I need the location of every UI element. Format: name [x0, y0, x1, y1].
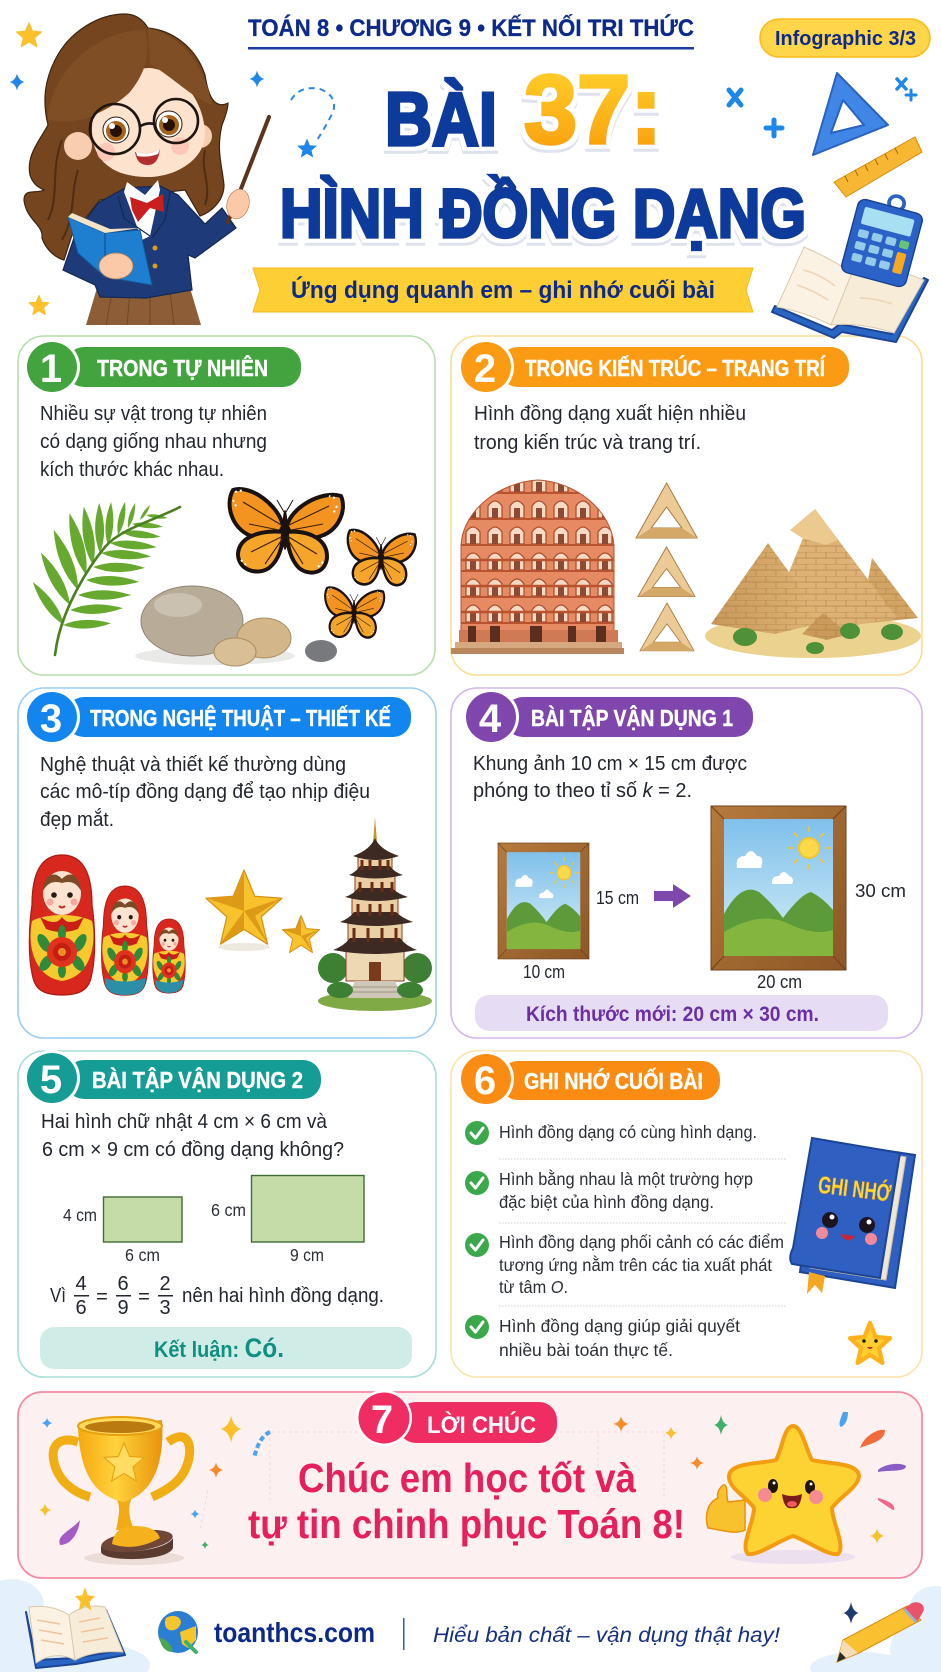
text block 1: kích thước khác nhau. [40, 459, 224, 481]
infographic badge [760, 19, 930, 57]
icon: similar triangles [636, 483, 697, 651]
label: 30 cm: 30 cm [855, 881, 906, 901]
blazer [63, 180, 236, 298]
heading 4: 4 [479, 697, 502, 741]
icon: set square [813, 73, 888, 155]
callout 4: Kích thước mới: 20 cm × 30 cm. [526, 1002, 819, 1026]
formula [50, 1273, 384, 1319]
title line 2: HÌNH ĐỒNG DẠNG [280, 175, 806, 252]
heading 7: 7 [371, 1398, 393, 1442]
subtitle ribbon: Ứng dụng quanh em – ghi nhớ cuối bài [291, 276, 715, 304]
wish message [248, 1455, 685, 1547]
subtitle ribbon [253, 268, 753, 312]
heading 4: BÀI TẬP VẬN DỤNG 1 [531, 704, 733, 731]
text block 1: có dạng giống nhau nhưng [40, 431, 267, 453]
heading 5: BÀI TẬP VẬN DỤNG 2 [92, 1066, 303, 1093]
icon: calculator [840, 187, 927, 288]
formula: 6 [117, 1273, 129, 1295]
heading 2: 2 [474, 347, 496, 391]
diagram: small rectangle [63, 1197, 182, 1265]
text block 5: Hai hình chữ nhật 4 cm × 6 cm và [41, 1111, 328, 1133]
skirt [86, 288, 201, 325]
icon: small star [850, 1323, 890, 1363]
icon: open book [772, 247, 928, 342]
formula: Vì [50, 1285, 66, 1307]
face [48, 28, 212, 177]
label: 10 cm: 10 cm [523, 962, 565, 982]
heading 6: 6 [474, 1059, 496, 1103]
icon: star character [706, 1426, 859, 1564]
icon: trophy [53, 1417, 190, 1565]
header decoration stars [9, 23, 916, 315]
heading 5: 5 [40, 1058, 62, 1102]
arrow [654, 884, 691, 908]
heading 4 [463, 689, 753, 745]
diagram: small frame [498, 843, 589, 959]
text block 5 [41, 1111, 344, 1161]
heading 5 [24, 1050, 321, 1106]
list item 4 [465, 1315, 740, 1360]
heading 2: TRONG KIẾN TRÚC – TRANG TRÍ [525, 354, 825, 381]
heading 3 [24, 689, 411, 745]
list item 4: nhiều bài toán thực tế. [499, 1340, 673, 1360]
heading 6 [458, 1051, 720, 1107]
text block 1: Nhiều sự vật trong tự nhiên [40, 403, 267, 425]
icon: footer book [26, 1587, 125, 1668]
text block 3: Nghệ thuật và thiết kế thường dùng [40, 754, 346, 776]
text block 2: Hình đồng dạng xuất hiện nhiều [474, 403, 746, 425]
wish message: Chúc em học tốt và [298, 1455, 636, 1501]
infographic badge: Infographic 3/3 [775, 28, 916, 50]
book held [68, 213, 152, 285]
text block 2: trong kiến trúc và trang trí. [474, 432, 701, 454]
list item 3: từ tâm O. [499, 1277, 568, 1297]
label: 15 cm: 15 cm [596, 888, 639, 908]
panel 3: trong nghệ thuật – thiết kế [18, 688, 436, 1038]
formula: 9 [117, 1297, 129, 1319]
icon: pagoda [318, 817, 432, 1011]
list item 3 [465, 1232, 784, 1297]
list item 1 [465, 1121, 757, 1145]
formula: 3 [159, 1297, 171, 1319]
icon: confetti right [613, 1412, 906, 1544]
list item 1: Hình đồng dạng có cùng hình dạng. [499, 1122, 757, 1142]
footer clouds [0, 1579, 941, 1672]
diagram: small rectangle: 4 cm [63, 1205, 97, 1225]
panel 1: trong tự nhiên [18, 336, 435, 675]
text block 4: Khung ảnh 10 cm × 15 cm được [473, 753, 747, 775]
title line 1: BÀI [385, 77, 497, 161]
label: 20 cm: 20 cm [757, 972, 802, 992]
heading 2 [458, 339, 849, 395]
panel 7: lời chúc [18, 1390, 922, 1578]
icon: stones [135, 586, 337, 666]
diagram: large frame [711, 806, 846, 970]
title line 1: 37: [524, 55, 662, 164]
icon: pyramids [705, 509, 921, 658]
icon: ghi nhớ book [790, 1138, 915, 1294]
formula: 4 [75, 1273, 87, 1295]
heading 7: LỜI CHÚC [427, 1411, 536, 1439]
icon: palace [451, 480, 624, 654]
panel 4: bài tập vận dụng 1 [451, 688, 922, 1038]
icon: gold stars [206, 870, 320, 953]
diagram: large rectangle [211, 1176, 364, 1265]
list item 2: Hình bằng nhau là một trường hợp [499, 1168, 753, 1189]
text block 2 [474, 403, 746, 454]
title line 1 [385, 55, 662, 164]
list item 4: Hình đồng dạng giúp giải quyết [499, 1316, 740, 1336]
heading 1 [24, 339, 301, 395]
hair back [24, 14, 228, 260]
icon: butterflies [230, 489, 416, 638]
diagram: small rectangle: 6 cm [125, 1245, 160, 1265]
callout 4 [475, 995, 888, 1031]
heading 1: 1 [40, 347, 62, 391]
text block 3 [40, 754, 370, 831]
text block 4 [473, 753, 747, 802]
list item 2: đặc biệt của hình đồng dạng. [499, 1192, 714, 1212]
list item 2 [465, 1168, 753, 1212]
heading 6: GHI NHỚ CUỐI BÀI [524, 1067, 703, 1094]
heading 3: TRONG NGHỆ THUẬT – THIẾT KẾ [90, 704, 391, 731]
character: teacher [24, 14, 269, 325]
text block 1 [40, 403, 267, 481]
icon: globe logo [158, 1611, 198, 1653]
list item 3: tương ứng nằm trên các tia xuất phát [499, 1254, 772, 1275]
diagram: large rectangle: 9 cm [290, 1245, 324, 1265]
icon: pencil [837, 1602, 924, 1662]
panel 2: trong kiến trúc – trang trí [451, 336, 922, 675]
diagram: large rectangle: 6 cm [211, 1200, 246, 1220]
wish message: tự tin chinh phục Toán 8! [248, 1501, 685, 1547]
callout 5 [40, 1327, 412, 1369]
icon: confetti left [39, 1416, 270, 1549]
hand [99, 253, 133, 279]
slogan: Hiểu bản chất – vận dụng thật hay! [433, 1623, 780, 1647]
callout 5: Kết luận: Có. [154, 1333, 284, 1363]
heading 1: TRONG TỰ NHIÊN [97, 354, 268, 381]
text block 4: phóng to theo tỉ số k = 2. [473, 780, 692, 802]
formula: = [96, 1286, 108, 1308]
list item 3: Hình đồng dạng phối cảnh có các điểm [499, 1232, 784, 1252]
divider [403, 1618, 404, 1650]
formula: 6 [75, 1297, 87, 1319]
text block 5: 6 cm × 9 cm có đồng dạng không? [42, 1139, 344, 1161]
formula: nên hai hình đồng dạng. [182, 1285, 384, 1307]
icon: nesting dolls [29, 855, 185, 995]
heading 3: 3 [40, 697, 62, 741]
icon: fern leaf [29, 501, 180, 655]
formula: = [138, 1286, 150, 1308]
formula: 2 [159, 1273, 171, 1295]
icon: ruler [834, 137, 922, 197]
pointer [228, 117, 269, 222]
text block 3: các mô-típ đồng dạng để tạo nhịp điệu [40, 781, 370, 803]
panel 5: bài tập vận dụng 2 [18, 1050, 436, 1377]
top heading: TOÁN 8 • CHƯƠNG 9 • KẾT NỐI TRI THỨC [248, 14, 694, 42]
heading 7 [356, 1390, 557, 1446]
panel 6: ghi nhớ cuối bài [451, 1051, 922, 1377]
text block 3: đẹp mắt. [40, 808, 114, 831]
icon: ghi nhớ book: GHI NHỚ [817, 1171, 893, 1207]
site name: toanthcs.com [214, 1617, 375, 1648]
